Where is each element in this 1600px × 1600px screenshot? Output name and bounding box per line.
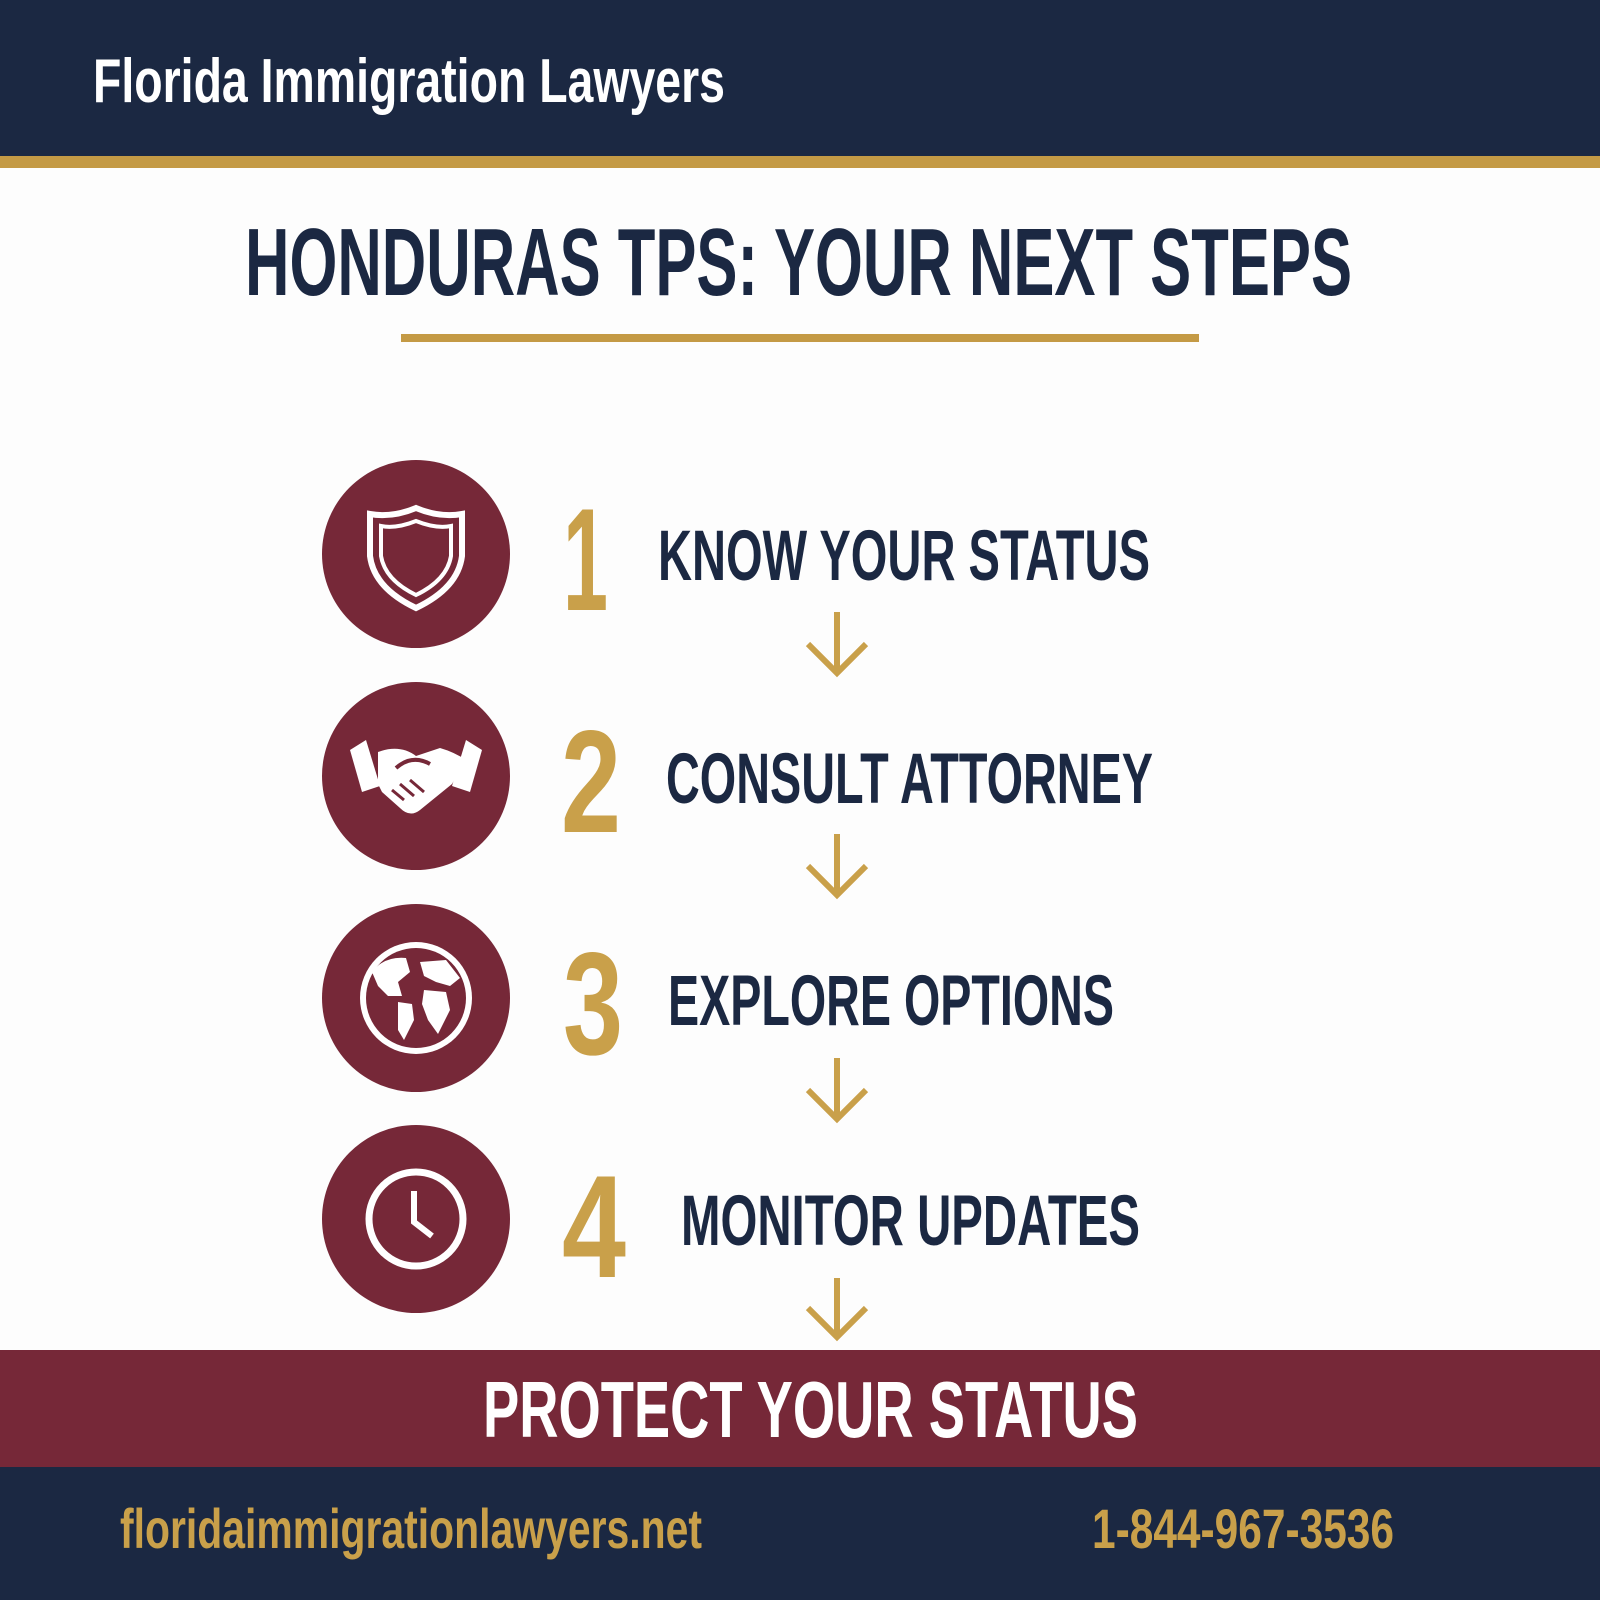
banner: protect your status: PROTECT YOUR STATUS — [483, 1365, 1138, 1454]
footer — [0, 1467, 1600, 1600]
title underline — [401, 334, 1199, 342]
banner: protect your status — [0, 1350, 1600, 1467]
step text 2: CONSULT ATTORNEY — [666, 740, 1153, 819]
step text 3: EXPLORE OPTIONS — [668, 962, 1114, 1041]
number 1: 1 — [563, 478, 608, 641]
step text 1: KNOW YOUR STATUS — [658, 517, 1150, 596]
step 2 — [322, 682, 1153, 870]
icon: globe — [322, 904, 510, 1092]
number 4: 4 — [562, 1145, 626, 1308]
header text: Florida Immigration Lawyers — [93, 47, 725, 116]
arrow 1 — [808, 612, 866, 673]
number 2: 2 — [561, 700, 621, 863]
arrow 2 — [808, 834, 866, 895]
step 3 — [322, 904, 1114, 1092]
step 4 — [322, 1125, 1140, 1313]
icon: handshake — [322, 682, 510, 870]
arrow 4 — [808, 1278, 866, 1337]
icon: clock — [322, 1125, 510, 1313]
step text 4: MONITOR UPDATES — [681, 1182, 1140, 1261]
number 3: 3 — [563, 922, 623, 1085]
header bar — [0, 0, 1600, 168]
arrow 3 — [808, 1058, 866, 1119]
footer url: floridaimmigrationlawyers.net — [120, 1497, 702, 1560]
footer phone: 1-844-967-3536 — [1092, 1497, 1394, 1560]
icon: shield — [322, 460, 510, 648]
step 1 — [322, 460, 1150, 648]
